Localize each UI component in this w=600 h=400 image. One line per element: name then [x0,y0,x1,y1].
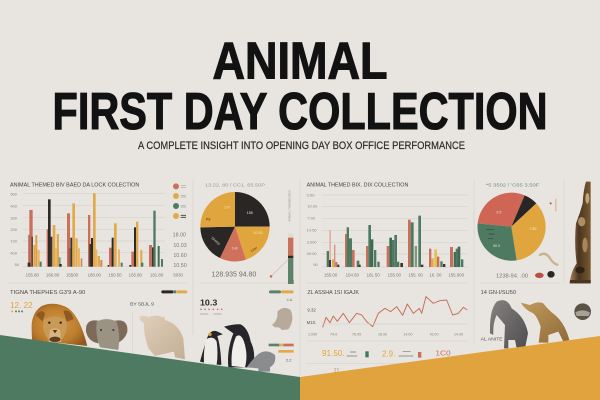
panel: animals right [481,280,591,348]
x labels: 16.00 [378,333,387,337]
top right of giraffe [570,280,591,283]
pie: Lion [250,246,258,253]
footer band: green [0,335,300,400]
x axis labels: 150.50 [108,273,122,278]
stacked bar with trend line: ANIMAL THEMED BOX [288,190,292,222]
y axis labels and grid: 400 [10,203,18,208]
x axis labels: 16. 00 [429,273,442,278]
animal: hippo-like calf [139,316,185,359]
small worm icon and marker [540,199,557,265]
x axis labels: 5030 [173,273,184,278]
title [52,32,548,141]
stat: orange [322,348,369,358]
animal: tawny lion cub [521,302,569,343]
animal: lion [32,304,87,346]
y labels: 9.32 [307,307,316,312]
small animal icons [535,271,555,278]
side values: 10.03 [173,243,187,249]
x axis labels [324,273,465,278]
panel: right side stats left block [200,280,294,363]
pie total: 128.935 94.80 [212,270,256,279]
pie heading: 13.22, 80 / CC1. 65.50P [205,183,266,189]
panel: line chart [307,290,468,375]
animal: penguin pair [200,324,254,367]
y axis labels and grid: 3.000 [307,239,317,244]
side values: 18.00 [173,233,186,239]
clipped stat: 11 [333,369,340,375]
x axis labels: 155.000 [448,273,465,278]
y axis labels and grid: 50 [15,262,20,267]
footer band: orange [300,336,600,400]
chart heading: ANIMAL THEMED BIV BAED DA LOCK COLECTION [10,183,139,189]
y axis labels and grid: 10.00 [307,204,318,209]
stat number: 10.3 [200,298,218,307]
y axis labels and grid: 14.50 [307,227,317,232]
panel: left pie chart [200,183,293,284]
animal: tall giraffe figure [569,182,591,283]
pie heading: *5 3502 / 'C65 3.50F [486,183,539,189]
pie: 230 [224,206,230,210]
x axis labels: 154.50 [346,273,359,278]
x labels: 14.00 [403,333,412,337]
stat: orange: 91.50. [322,348,345,358]
pie: 140 [232,246,238,250]
y axis labels and grid: 0:00 [307,192,315,197]
section heading: ZL ASSHA 1SI IGAJK [307,290,360,296]
chart heading: ANIMAL THEMED BIX. DIX COLLECTION [307,183,408,189]
y axis labels and grid: 100 [10,239,18,244]
section heading: TIGNA THEPHES G3'9 A-90 [10,290,85,296]
mini legend bar [269,280,294,293]
legend [173,183,186,219]
pie: 9.5 [496,210,501,214]
x axis labels: 16L 50 [367,273,380,278]
y axis labels and grid: 00:00 [307,251,317,256]
pie: 50.0 [493,244,500,248]
small value: 2.2 [286,358,292,363]
y axis labels and grid: 300 [10,215,18,220]
animal: small grey elephant [247,351,275,372]
pie [200,192,270,261]
mini legend bar [161,290,187,293]
stat dots [200,308,222,314]
x axis labels: 15500 [66,273,79,278]
x labels: 76.00 [429,333,438,337]
line [323,297,467,327]
small label: 4.A [287,298,293,302]
animal: grey elephant [490,300,528,348]
x axis labels: 155.00 [388,273,401,278]
subtitle: A COMPLETE INSIGHT INTO OPENING DAY BOX OFFICE PERFORMANCE [138,140,465,152]
x labels: 74.0 [330,333,337,337]
title: ANIMAL [212,32,388,90]
section heading: 14 GN-I/SU50 [481,290,516,296]
x axis labels: 166.80 [46,273,60,278]
y labels [307,307,316,325]
x axis labels [26,273,184,278]
x axis labels: 165.80 [129,273,142,278]
animal: small bird [272,308,292,330]
pie [477,193,546,261]
side values: 10.50 [173,263,187,269]
pie: Pa [206,218,211,222]
x axis labels: 155.80 [26,273,39,278]
bars [327,216,463,267]
x labels: 14.00 [454,333,463,337]
stat: middle: 2.9. [382,349,395,359]
x labels: 1:000 [308,333,317,337]
pie: 155 [247,211,253,215]
y axis labels and grid: 200 [10,227,18,232]
y axis labels and grid: 500 [10,192,18,197]
stat: middle [382,349,421,359]
big number: 12. 22 [10,300,33,310]
y axis labels and grid [307,192,468,267]
pie: Sheep [210,236,221,246]
pie total: 1238-94. .00 [496,273,528,279]
stacked mini bars [269,344,294,353]
panel: animal themes row left [10,290,275,372]
animal: elephant [86,319,127,350]
y axis labels and grid: 400 [10,250,18,255]
pie: 10.30 [253,231,262,235]
panel: left bar chart [10,183,187,278]
bars [28,193,163,267]
y labels: M10. [307,320,316,325]
panel: right bar chart [307,183,468,278]
y axis labels and grid [10,192,165,267]
panel: right pie chart [477,182,591,283]
x axis labels: 181.80 [150,273,164,278]
stat: red: 1C0 [435,348,451,357]
label: AL ANITE [481,337,503,342]
label: BY 5BJL 9 [130,302,155,307]
x axis labels: 180.00 [88,273,101,278]
circular badge [574,303,591,320]
side values: 10.60 [173,253,187,259]
x axis labels: 155. 00 [408,273,423,278]
side values [173,233,187,269]
pie: 7.50 [529,227,536,231]
x labels [308,333,463,337]
marker dots [11,310,23,312]
panel dividers [8,180,564,377]
y axis labels and grid: 50 [313,262,319,267]
x labels: 76.00 [352,333,361,337]
y axis labels and grid: 7:00 [307,215,316,220]
x axis labels: 155.00 [324,273,338,278]
